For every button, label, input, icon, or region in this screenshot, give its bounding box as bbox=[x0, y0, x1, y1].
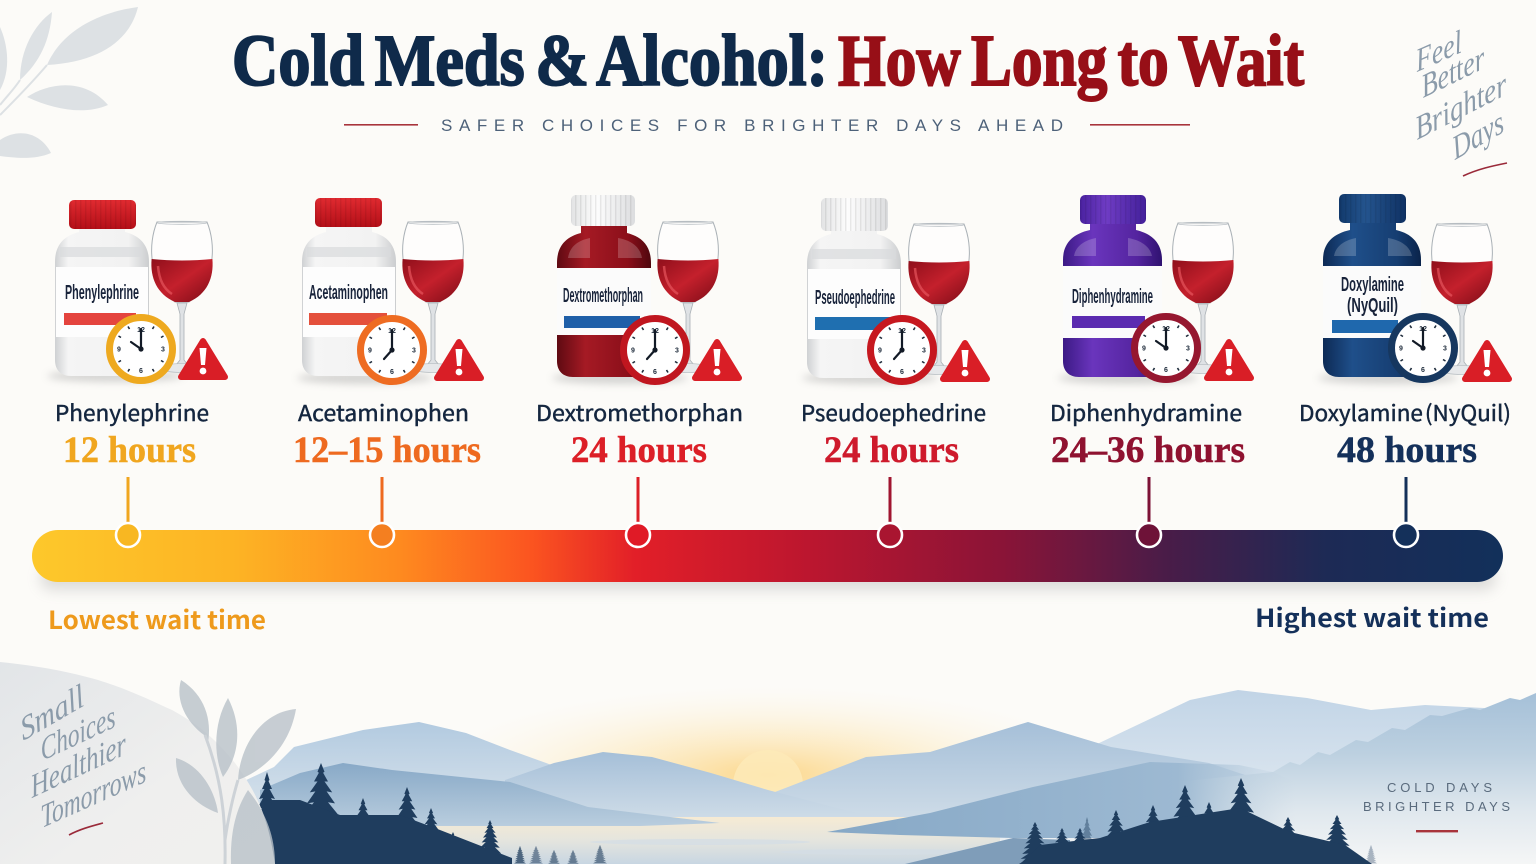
clock 5 bbox=[1134, 316, 1198, 380]
wait time 6: 48 hours bbox=[1337, 430, 1477, 471]
wait time 4: 24 hours bbox=[824, 430, 959, 471]
clock 3: 12 bbox=[651, 328, 659, 335]
drug name 2: Acetaminophen bbox=[298, 396, 469, 428]
clock 6: 9 bbox=[1399, 346, 1403, 352]
clock 5: 3 bbox=[1186, 346, 1190, 352]
right tree group bbox=[1019, 778, 1377, 864]
marker 6 bbox=[1394, 477, 1418, 547]
clock 5: 6 bbox=[1164, 367, 1168, 374]
bottle 2 bbox=[297, 198, 433, 384]
clock 3 bbox=[624, 318, 686, 382]
center mountain bbox=[505, 752, 880, 817]
wine glass 2 bbox=[402, 221, 464, 372]
clock 5: 12 bbox=[1162, 326, 1170, 333]
shoreline bbox=[905, 838, 1070, 864]
warning icon 5 bbox=[1207, 342, 1251, 378]
bottle 4 bbox=[802, 198, 938, 384]
wait time 5: 24–36 hours bbox=[1051, 430, 1245, 471]
lowest wait time label: Lowest wait time bbox=[48, 601, 266, 637]
marker 2 bbox=[370, 477, 394, 547]
bottle 1 bbox=[47, 200, 183, 382]
clock 3: 6 bbox=[653, 369, 657, 376]
sun glow bbox=[428, 686, 1108, 864]
handwritten note: small choices healthier tomorrows: Tomorrows bbox=[39, 753, 148, 835]
clock 2: 12 bbox=[388, 328, 396, 335]
item 2: acetaminophen bbox=[293, 198, 481, 471]
landscape scene bbox=[225, 686, 1536, 864]
drug name 3: Dextromethorphan bbox=[536, 396, 743, 428]
clock 4 bbox=[870, 318, 934, 382]
clock 4: 12 bbox=[898, 328, 906, 335]
clock 1 bbox=[110, 318, 172, 380]
right mid hill bbox=[827, 762, 1295, 838]
item 6: doxylamine nyquil bbox=[1299, 194, 1511, 471]
far left mountain bbox=[225, 722, 560, 817]
plant leaves bbox=[176, 680, 296, 864]
clock 4: 9 bbox=[878, 348, 882, 354]
lake bbox=[270, 816, 1070, 864]
bottle 1: Phenylephrine bbox=[65, 282, 139, 304]
bottle 6: Doxylamine bbox=[1341, 274, 1404, 296]
clock 2: 9 bbox=[368, 348, 372, 354]
clock 3: 3 bbox=[675, 348, 679, 354]
bottle 3 bbox=[552, 195, 688, 384]
timeline gradient bar with markers bbox=[32, 477, 1503, 590]
warning icon 4 bbox=[943, 343, 987, 379]
clock 1: 12 bbox=[137, 327, 145, 334]
clock 2: 3 bbox=[412, 348, 416, 354]
wine glass 4 bbox=[908, 223, 970, 374]
marker 3 bbox=[626, 477, 650, 547]
clock 4: 3 bbox=[922, 348, 926, 354]
drug name 6: Doxylamine (NyQuil) bbox=[1299, 396, 1511, 428]
marker 5 bbox=[1137, 477, 1161, 547]
handwritten note: feel better brighter days: Feel bbox=[1413, 23, 1464, 79]
wine glass 1 bbox=[151, 221, 213, 372]
handwritten note: feel better brighter days: Brighter bbox=[1413, 65, 1510, 147]
bottle 2: Acetaminophen bbox=[309, 282, 388, 304]
wait time 2: 12–15 hours bbox=[293, 430, 481, 471]
marker 1 bbox=[116, 477, 140, 547]
clock 1: 9 bbox=[117, 346, 121, 354]
bottle 6: (NyQuil) bbox=[1347, 295, 1398, 317]
tagline bottom right bbox=[1363, 780, 1510, 832]
warning icon 2 bbox=[437, 342, 481, 378]
clock 6: 12 bbox=[1419, 326, 1427, 333]
right ridge with mist bbox=[1000, 693, 1536, 864]
drug name 4: Pseudoephedrine bbox=[801, 396, 986, 428]
bottle 6 bbox=[1318, 194, 1458, 384]
handwritten note: small choices healthier tomorrows: Small bbox=[17, 677, 87, 748]
handwritten note: feel better brighter days bbox=[1413, 23, 1510, 176]
clock 6: 6 bbox=[1421, 367, 1425, 374]
clock 1: 6 bbox=[139, 368, 143, 375]
warning icon 6 bbox=[1465, 343, 1509, 379]
warning icon 1 bbox=[181, 341, 225, 377]
handwritten note: small choices healthier tomorrows: Healthier bbox=[28, 725, 129, 805]
item 3: dextromethorphan bbox=[536, 195, 743, 471]
left foreground hill bbox=[260, 763, 720, 826]
bottle 5: Diphenhydramine bbox=[1072, 286, 1153, 308]
handwritten note: feel better brighter days: Better bbox=[1419, 39, 1487, 105]
bottle 4: Pseudoephedrine bbox=[815, 287, 895, 309]
title: Cold Meds & Alcohol: bbox=[232, 20, 828, 101]
clock 2: 6 bbox=[390, 369, 394, 376]
item 5: diphenhydramine bbox=[1050, 195, 1251, 471]
wine glass 3 bbox=[657, 221, 719, 372]
tagline bottom right: COLD DAYS bbox=[1387, 780, 1492, 795]
highest wait time label: Highest wait time bbox=[1255, 599, 1489, 635]
sun bbox=[733, 750, 803, 820]
clock 5: 9 bbox=[1142, 346, 1146, 352]
title: How Long to Wait bbox=[838, 20, 1304, 101]
clock 2 bbox=[360, 318, 424, 382]
bottom-left light panel with leaves bbox=[0, 662, 296, 864]
drug name 1: Phenylephrine bbox=[55, 396, 209, 428]
clock 4: 6 bbox=[900, 369, 904, 376]
wait time 3: 24 hours bbox=[571, 430, 707, 471]
clock 6 bbox=[1392, 316, 1454, 380]
tagline bottom right: BRIGHTER DAYS bbox=[1363, 799, 1510, 814]
handwritten note: small choices healthier tomorrows bbox=[17, 677, 148, 835]
handwritten note: feel better brighter days: Days bbox=[1448, 103, 1507, 167]
wine glass 6 bbox=[1431, 223, 1493, 374]
wine glass 5 bbox=[1172, 222, 1234, 374]
clock 1: 3 bbox=[161, 346, 165, 354]
decorative leaves top left bbox=[0, 7, 138, 158]
center right mountain bbox=[775, 722, 1290, 817]
item 4: pseudoephedrine bbox=[801, 198, 987, 471]
wait time 1: 12 hours bbox=[63, 430, 196, 471]
clock 6: 3 bbox=[1443, 346, 1447, 352]
clock 3: 9 bbox=[631, 348, 635, 354]
bottle 5 bbox=[1058, 195, 1198, 384]
warning icon 3 bbox=[695, 342, 739, 378]
title bbox=[232, 20, 1304, 101]
far right mountains bbox=[1095, 690, 1536, 820]
bottle 3: Dextromethorphan bbox=[563, 285, 643, 307]
left tree group bbox=[247, 763, 607, 864]
handwritten note: small choices healthier tomorrows: Choices bbox=[39, 698, 117, 768]
marker 4 bbox=[878, 477, 902, 547]
item 1: phenylephrine bbox=[47, 200, 225, 471]
drug name 5: Diphenhydramine bbox=[1050, 396, 1242, 428]
subtitle with side rules: SAFER CHOICES FOR BRIGHTER DAYS AHEAD bbox=[441, 116, 1063, 135]
